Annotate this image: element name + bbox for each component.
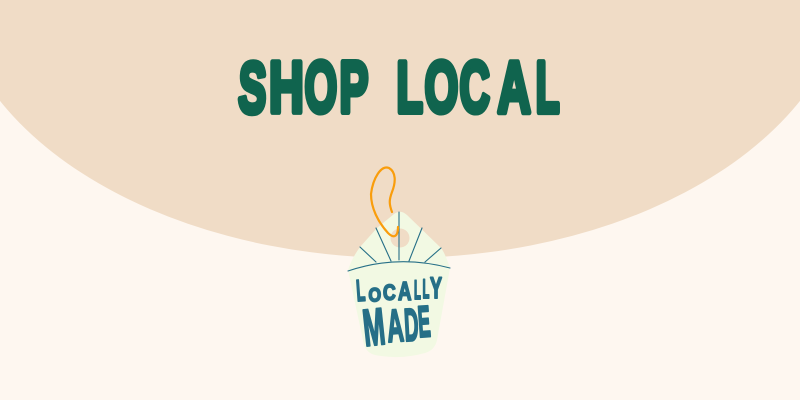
tag text: locally: Y [430, 273, 442, 305]
tag text: made [360, 297, 432, 357]
tag rays and arc [348, 212, 450, 271]
tag body [348, 212, 450, 357]
tag text: made: E [416, 297, 432, 347]
tag text: locally: O [368, 284, 381, 306]
title: O [425, 47, 458, 128]
title: H [269, 47, 304, 127]
tag text: locally: C [383, 281, 396, 306]
price tag [348, 168, 450, 357]
tag text: made: M [360, 297, 388, 357]
beige ellipse panel [0, 0, 800, 258]
title: A [498, 46, 531, 127]
tag text: locally: L [355, 274, 366, 307]
title: S [237, 48, 268, 129]
tag string [371, 168, 398, 236]
title: L [536, 49, 560, 128]
tag text: made: A [385, 299, 405, 352]
tag text: locally: A [398, 276, 412, 306]
tag text: made: D [403, 299, 420, 351]
tag text: locally: L [414, 276, 421, 306]
tag text: locally: L [422, 275, 429, 305]
tag hole [390, 228, 410, 248]
title [237, 46, 560, 129]
title: P [340, 47, 368, 128]
title: O [305, 48, 337, 128]
title: L [396, 47, 423, 128]
title: C [460, 48, 490, 128]
tag text: locally [355, 273, 442, 307]
